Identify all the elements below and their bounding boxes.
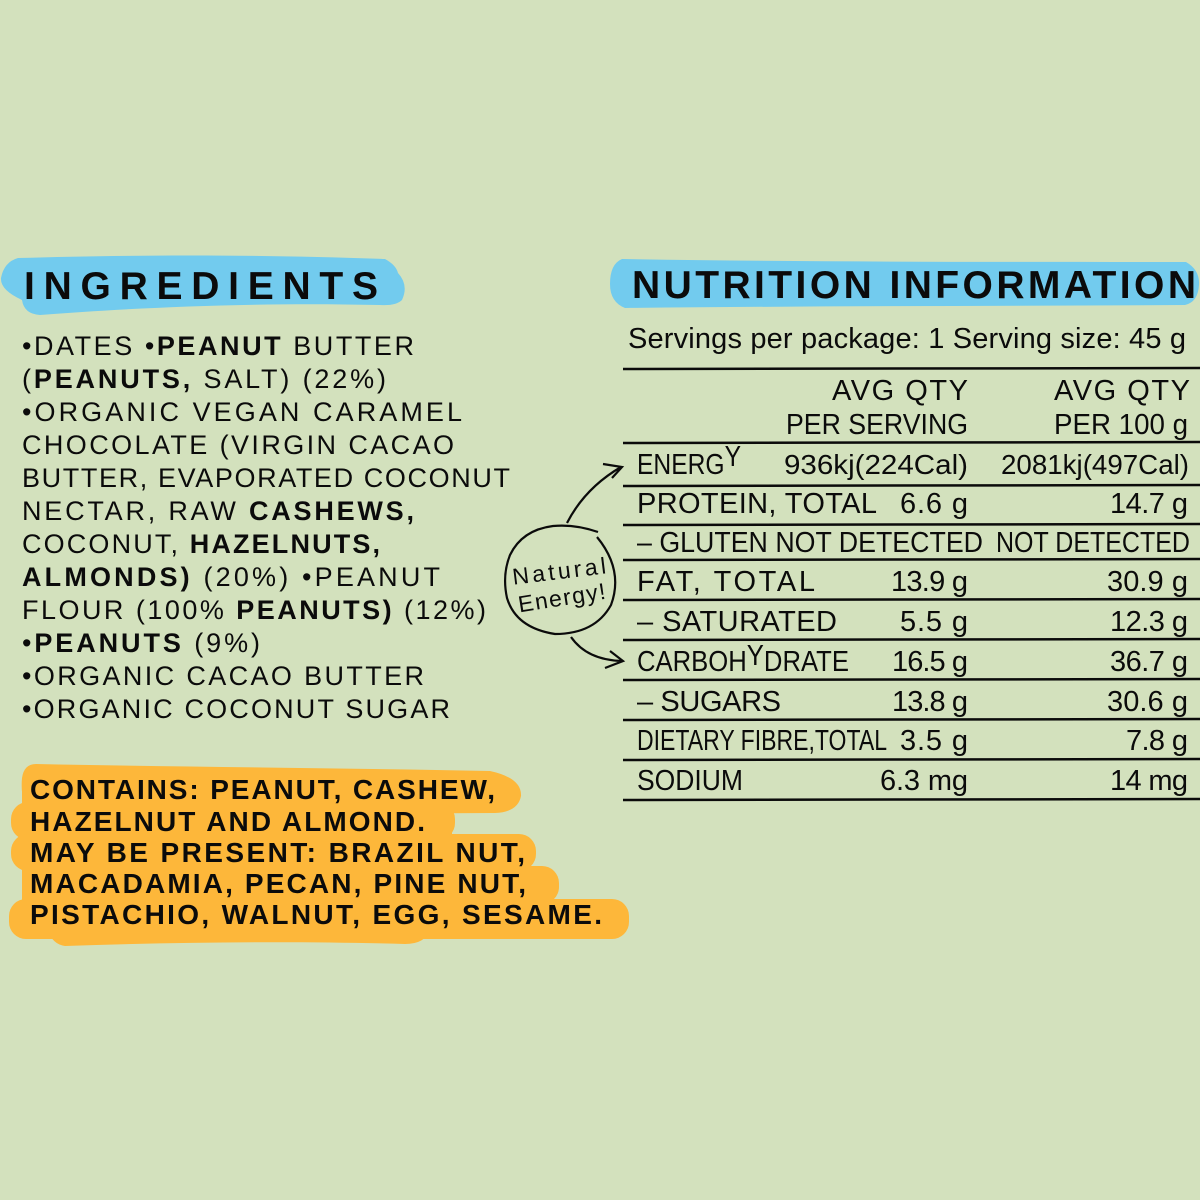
row labels: DRATE <box>764 646 849 678</box>
per serving values: 6.6 g <box>900 488 968 520</box>
ingredients list: •ORGANIC COCONUT SUGAR <box>22 694 450 724</box>
ingredients list: BUTTER, EVAPORATED COCONUT <box>22 463 510 493</box>
allergen callout: CONTAINS: PEANUT, CASHEW, <box>30 774 495 805</box>
row labels: CARBOH <box>637 646 761 678</box>
ingredients list <box>22 331 510 724</box>
row labels: Y <box>747 640 764 672</box>
servings line: Servings per package: 1 Serving size: 45 g <box>628 323 1186 355</box>
per serving values: 13.9 g <box>891 566 968 598</box>
ingredients list: ALMONDS) (20%) •PEANUT <box>22 562 440 592</box>
column headers: PER 100 g <box>1054 409 1188 441</box>
row labels: PROTEIN, TOTAL <box>637 488 877 520</box>
nutrition table <box>623 368 1200 800</box>
per 100 g values: 2081kj(497Cal) <box>1001 449 1189 480</box>
ingredients list: COCONUT, HAZELNUTS, <box>22 529 380 559</box>
arrow to energy <box>567 464 622 523</box>
ingredients list: •DATES •PEANUT BUTTER <box>22 331 414 361</box>
column headers: AVG QTY <box>832 375 968 407</box>
row labels: ENERG <box>637 449 740 481</box>
per serving values: 16.5 g <box>892 646 968 678</box>
per serving values: 3.5 g <box>900 725 968 757</box>
allergen callout: HAZELNUT AND ALMOND. <box>30 806 425 837</box>
row labels: FAT, TOTAL <box>637 566 815 598</box>
column headers: AVG QTY <box>1054 375 1190 407</box>
per 100 g values: 14.7 g <box>1110 488 1188 520</box>
row labels: DIETARY FIBRE,TOTAL <box>637 725 887 757</box>
ingredients list: CHOCOLATE (VIRGIN CACAO <box>22 430 454 460</box>
row labels: SODIUM <box>637 765 743 797</box>
per 100 g values: 14 mg <box>1110 765 1188 797</box>
natural energy badge: Natural <box>511 552 607 590</box>
ingredients heading: INGREDIENTS <box>24 265 378 308</box>
ingredients list: •PEANUTS (9%) <box>22 628 260 658</box>
per 100 g values <box>996 449 1190 797</box>
column headers <box>786 375 1190 441</box>
arrow to carbohydrate <box>571 637 623 668</box>
per serving values: 6.3 mg <box>880 765 968 797</box>
allergen callout: PISTACHIO, WALNUT, EGG, SESAME. <box>30 899 602 930</box>
row labels: Y <box>725 441 741 473</box>
ingredients list: •ORGANIC CACAO BUTTER <box>22 661 424 691</box>
ingredients list: NECTAR, RAW CASHEWS, <box>22 496 414 526</box>
per 100 g values: 12.3 g <box>1110 606 1188 638</box>
ingredients list: FLOUR (100% PEANUTS) (12%) <box>22 595 486 625</box>
per 100 g values: 7.8 g <box>1126 725 1188 757</box>
ingredients list: (PEANUTS, SALT) (22%) <box>22 364 386 394</box>
per 100 g values: 30.6 g <box>1107 686 1188 718</box>
per serving values <box>784 449 968 797</box>
natural energy badge <box>505 526 615 634</box>
per 100 g values: 30.9 g <box>1107 566 1188 598</box>
ingredients list: •ORGANIC VEGAN CARAMEL <box>22 397 462 427</box>
row labels: – SATURATED <box>637 606 837 638</box>
column headers: PER SERVING <box>786 409 968 441</box>
per serving values: 13.8 g <box>892 686 968 718</box>
natural energy badge: Energy! <box>516 578 607 617</box>
allergen callout: MAY BE PRESENT: BRAZIL NUT, <box>30 837 525 868</box>
row labels <box>637 441 983 797</box>
allergen callout: MACADAMIA, PECAN, PINE NUT, <box>30 868 526 899</box>
nutrition heading: NUTRITION INFORMATION <box>632 264 1196 307</box>
per serving values: 936kj(224Cal) <box>784 449 968 480</box>
per 100 g values: 36.7 g <box>1110 646 1188 678</box>
per serving values: 5.5 g <box>900 606 968 638</box>
row labels: – GLUTEN NOT DETECTED <box>637 527 983 559</box>
row labels: – SUGARS <box>637 686 781 718</box>
ingredients heading <box>1 256 405 315</box>
allergen callout <box>9 764 629 946</box>
